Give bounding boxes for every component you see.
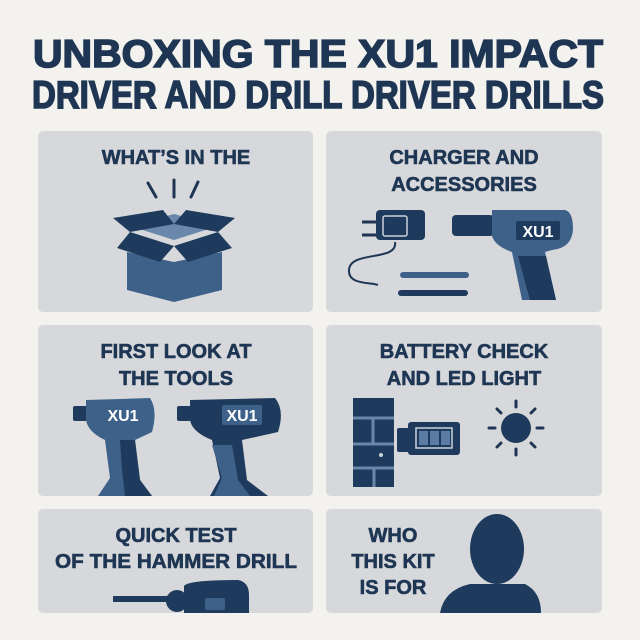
- panel: quick test hammer drill: [38, 509, 313, 613]
- heading: battery check: BATTERY CHECK: [380, 341, 549, 363]
- icon: hammer drill: [113, 580, 249, 613]
- icon: sun: [489, 401, 543, 455]
- icon: brick wall: [353, 398, 394, 487]
- icon: impact driver 2: [177, 398, 281, 496]
- icon: impact driver 1: XU1: [107, 408, 139, 425]
- icon: drill XU1: XU1: [522, 224, 554, 241]
- icon: battery indicator: [397, 422, 460, 455]
- panel: battery check and led light: AND LED LIGHT: [387, 368, 541, 390]
- panel: first look at the tools: [38, 325, 313, 496]
- panel: first look at the tools: THE TOOLS: [119, 368, 233, 390]
- icon: impact driver 2: XU1: [226, 408, 258, 425]
- panel: charger and accessories: ACCESSORIES: [391, 174, 537, 196]
- icon: open box: [113, 180, 235, 302]
- heading: first look: FIRST LOOK AT: [100, 341, 252, 363]
- icon: impact driver 1: [73, 398, 155, 496]
- panel: battery check and led light: [326, 325, 602, 496]
- icon: charger: [349, 210, 469, 296]
- heading: what's in the: WHAT’S IN THE: [102, 147, 250, 169]
- panel: who this kit is for: [326, 509, 602, 613]
- heading: quick test: QUICK TEST: [115, 525, 237, 547]
- icon: drill XU1: [452, 210, 573, 300]
- heading: charger and accessories: CHARGER AND: [389, 147, 539, 169]
- panel: who this kit is for: IS FOR: [360, 577, 427, 599]
- panel: charger and accessories: [326, 131, 602, 312]
- panel: what's in the box: [38, 131, 313, 312]
- heading: who this kit is for: WHO: [369, 525, 417, 547]
- title: [32, 33, 604, 117]
- panel: quick test hammer drill: OF THE HAMMER DRILL: [55, 551, 297, 573]
- title: UNBOXING THE XU1 IMPACT: [33, 33, 603, 76]
- panel: who this kit is for: THIS KIT: [351, 551, 435, 573]
- icon: person silhouette: [440, 514, 541, 613]
